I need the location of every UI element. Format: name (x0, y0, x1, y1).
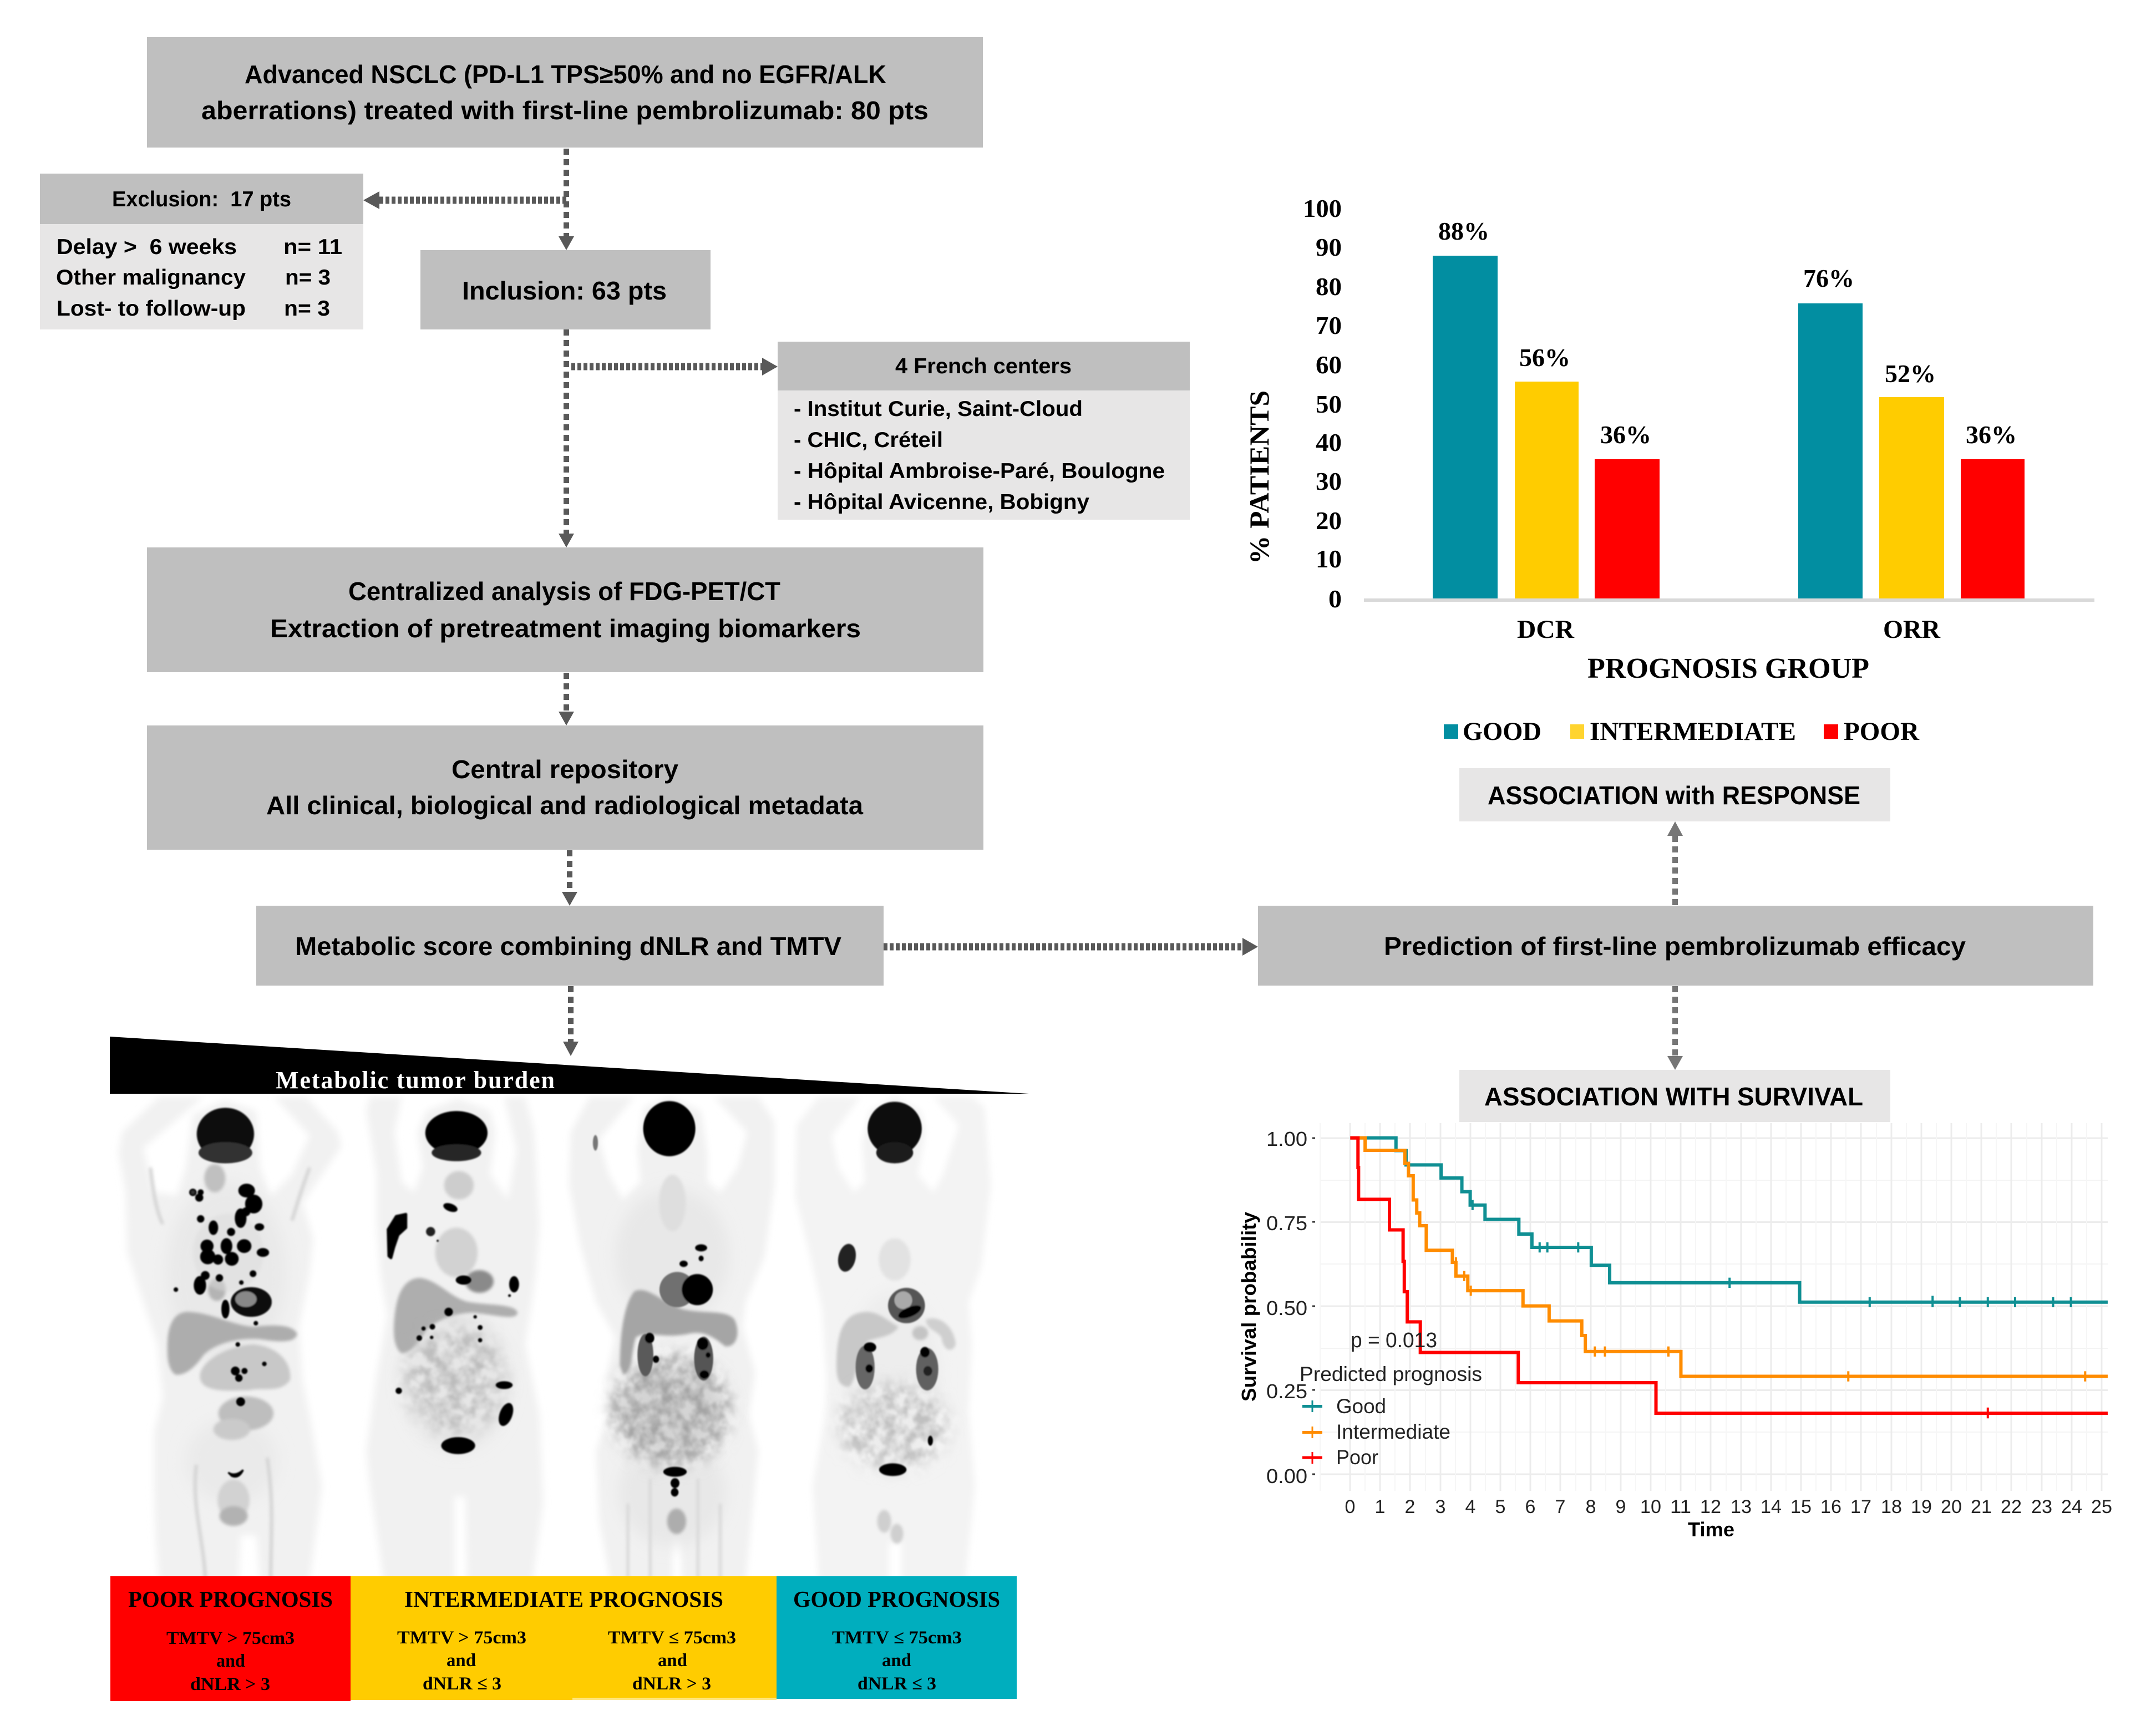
panel: exclusion: Lost- to follow-up (57, 297, 246, 321)
y axis labels: 40 (1316, 428, 1342, 456)
intermediate prognosis box: TMTV ≤ 75cm3 (608, 1628, 736, 1648)
panel: exclusion: Exclusion: 17 pts (112, 187, 291, 211)
curve: good prognosis (1350, 1138, 2108, 1307)
box: eligible population (147, 37, 983, 148)
lesions (175, 1185, 268, 1477)
lesions (593, 1135, 713, 1496)
panel: exclusion: n= 3 (284, 297, 330, 321)
panel: exclusion: Delay > 6 weeks (57, 235, 237, 259)
box: metabolic score: Metabolic score combining dNLR and TMTV (295, 932, 841, 961)
x axis title: Time (1688, 1518, 1734, 1541)
box: eligible population: aberrations) treated with first-line pembrolizumab: 80 pts (201, 96, 929, 125)
x tick labels: 6 (1525, 1496, 1535, 1517)
intermediate prognosis box: dNLR ≤ 3 (423, 1674, 501, 1694)
box: central repository (147, 725, 983, 850)
box: central repository: Central repository (451, 755, 678, 784)
bar value labels (1438, 217, 2017, 449)
box: centralized analysis (147, 547, 983, 672)
arrow: analysis to repository (559, 673, 574, 725)
good prognosis box: TMTV ≤ 75cm3 (832, 1628, 962, 1648)
y axis labels: 80 (1316, 272, 1342, 301)
x tick labels: 24 (2061, 1496, 2082, 1517)
curves (1350, 1138, 2108, 1418)
intermediate prognosis box: and (658, 1651, 687, 1671)
panel: PET scans (119, 1097, 991, 1581)
y tick labels: 0.75 (1266, 1212, 1307, 1235)
x tick labels: 12 (1700, 1496, 1721, 1517)
box: inclusion (420, 250, 711, 329)
y tick labels (1266, 1128, 1315, 1488)
curve: poor prognosis (1350, 1138, 2108, 1418)
x tick labels: 11 (1670, 1496, 1691, 1517)
arrow: score to prediction (884, 938, 1258, 956)
panel: exclusion (40, 174, 363, 329)
organs (836, 1238, 956, 1544)
organs (150, 1164, 310, 1578)
y axis labels (1303, 194, 1342, 613)
category labels: DCR (1517, 615, 1575, 644)
x tick labels: 22 (2001, 1496, 2022, 1517)
intermediate prognosis box: and (447, 1651, 476, 1671)
x tick labels: 5 (1495, 1496, 1505, 1517)
x axis title: PROGNOSIS GROUP (1587, 653, 1869, 684)
x tick labels: 8 (1586, 1496, 1596, 1517)
panel: french centers (778, 342, 1190, 520)
lesions (388, 1201, 519, 1454)
legend: Intermediate (1336, 1420, 1450, 1443)
arrow: prediction to survival (1667, 986, 1683, 1070)
silhouette (795, 1097, 991, 1581)
silhouette (119, 1097, 342, 1581)
PET scan 2: intermediate prognosis (366, 1097, 543, 1581)
mottled abdomen (610, 1353, 732, 1466)
y axis labels: 20 (1316, 506, 1342, 535)
panel: french centers: - Hôpital Avicenne, Bobigny (794, 490, 1089, 514)
bar value labels: 76% (1803, 265, 1854, 292)
box: association with survival (1459, 1070, 1890, 1122)
intermediate prognosis box: INTERMEDIATE PROGNOSIS (404, 1586, 723, 1612)
arrow: population to inclusion (559, 149, 574, 250)
arrow: repository to score (562, 850, 577, 906)
x tick labels: 17 (1850, 1496, 1871, 1517)
legend: POOR (1844, 717, 1920, 746)
category labels: ORR (1883, 615, 1941, 644)
panel: prognosis groups (110, 1576, 1017, 1701)
box: prediction of efficacy (1258, 906, 2093, 986)
wedge: metabolic tumor burden (110, 1037, 1029, 1094)
x tick labels: 7 (1555, 1496, 1565, 1517)
x tick labels: 19 (1911, 1496, 1932, 1517)
good prognosis box (777, 1576, 1017, 1699)
panel: exclusion: Other malignancy (56, 266, 246, 290)
curve: intermediate prognosis (1350, 1138, 2108, 1382)
legend (1300, 1363, 1482, 1469)
box: association with survival: ASSOCIATION WITH SURVIVAL (1484, 1082, 1863, 1111)
x tick labels: 4 (1465, 1496, 1475, 1517)
y axis title: Survival probability (1237, 1212, 1260, 1402)
x tick labels: 9 (1616, 1496, 1626, 1517)
box: inclusion: Inclusion: 63 pts (462, 276, 667, 305)
x tick labels: 3 (1435, 1496, 1445, 1517)
arrow: inclusion to centralized analysis (559, 329, 574, 547)
panel: french centers: - Hôpital Ambroise-Paré, Boulogne (794, 459, 1165, 483)
panel: exclusion: n= 11 (283, 235, 342, 259)
x tick labels: 23 (2031, 1496, 2052, 1517)
legend: Good (1336, 1395, 1386, 1418)
x tick labels: 0 (1345, 1496, 1355, 1517)
y axis labels: 90 (1316, 233, 1342, 261)
p value: p = 0.013 (1351, 1329, 1437, 1352)
bar value labels: 36% (1600, 421, 1651, 449)
good prognosis box: GOOD PROGNOSIS (793, 1586, 1000, 1612)
box: centralized analysis: Centralized analysis of FDG-PET/CT (348, 577, 780, 606)
x tick labels: 18 (1881, 1496, 1902, 1517)
legend: Poor (1336, 1446, 1378, 1469)
mottled abdomen (405, 1327, 504, 1433)
brain (425, 1111, 488, 1161)
y axis labels: 100 (1303, 194, 1342, 222)
box: centralized analysis: Extraction of pretreatment imaging biomarkers (270, 614, 861, 643)
bar chart: response by prognosis group (1244, 194, 2094, 746)
lesions (835, 1242, 938, 1476)
box: association with response: ASSOCIATION with RESPONSE (1488, 781, 1860, 810)
intermediate prognosis box: dNLR > 3 (632, 1674, 711, 1694)
liver (620, 1290, 737, 1374)
heart ring (231, 1287, 272, 1317)
legend (1444, 717, 1920, 746)
silhouette (366, 1097, 543, 1581)
x tick labels: 13 (1731, 1496, 1752, 1517)
organs (628, 1175, 720, 1578)
brain (867, 1102, 922, 1163)
y axis labels: 0 (1328, 585, 1342, 613)
arrow: score to PET images (563, 986, 579, 1056)
PET scan 4: good prognosis (795, 1097, 991, 1581)
y axis labels: 30 (1316, 467, 1342, 495)
panel: french centers: - Institut Curie, Saint-Cloud (794, 397, 1083, 421)
poor prognosis box: TMTV > 75cm3 (166, 1628, 295, 1648)
y axis labels: 10 (1316, 545, 1342, 573)
legend: GOOD (1463, 717, 1541, 746)
PET scan 1: poor prognosis (119, 1097, 342, 1581)
PET scan 3: intermediate prognosis (569, 1097, 774, 1581)
intermediate prognosis box: TMTV > 75cm3 (397, 1628, 526, 1648)
x tick labels: 16 (1820, 1496, 1841, 1517)
poor prognosis box: POOR PROGNOSIS (128, 1586, 333, 1612)
silhouette (569, 1097, 774, 1581)
bar value labels: 52% (1885, 360, 1936, 388)
x tick labels: 14 (1761, 1496, 1782, 1517)
x tick labels: 25 (2091, 1496, 2112, 1517)
y axis title: % PATIENTS (1244, 390, 1275, 564)
x tick labels: 15 (1790, 1496, 1812, 1517)
bars: ORR (1798, 303, 2025, 598)
y axis labels: 50 (1316, 390, 1342, 418)
brain (197, 1108, 254, 1163)
good prognosis box: dNLR ≤ 3 (858, 1674, 936, 1694)
wedge: metabolic tumor burden: Metabolic tumor burden (276, 1067, 555, 1094)
brain (643, 1101, 696, 1156)
x tick labels: 20 (1941, 1496, 1962, 1517)
organs (394, 1171, 518, 1353)
box: central repository: All clinical, biological and radiological metadata (266, 791, 863, 820)
y tick labels: 0.00 (1266, 1465, 1307, 1488)
category labels (1517, 615, 1941, 644)
x tick labels: 10 (1640, 1496, 1661, 1517)
panel: french centers: - CHIC, Créteil (794, 428, 943, 452)
chart: Kaplan-Meier survival curves (1237, 1123, 2112, 1541)
panel: french centers: 4 French centers (895, 354, 1072, 378)
x axis line (1364, 598, 2094, 602)
x tick labels: 21 (1971, 1496, 1992, 1517)
poor prognosis box (110, 1576, 351, 1701)
arrow: to exclusion (363, 191, 566, 209)
x tick labels: 1 (1375, 1496, 1385, 1517)
y tick labels: 0.25 (1266, 1380, 1307, 1403)
bar value labels: 36% (1966, 421, 2017, 449)
good prognosis box: and (882, 1651, 911, 1671)
bars: DCR (1433, 256, 1660, 598)
poor prognosis box: and (216, 1651, 245, 1671)
legend: INTERMEDIATE (1590, 717, 1796, 746)
box: eligible population: Advanced NSCLC (PD-L1 TPS≥50% and no EGFR/ALK (245, 60, 886, 89)
bar value labels: 56% (1519, 344, 1570, 372)
y tick labels: 0.50 (1266, 1297, 1307, 1319)
intermediate prognosis box (351, 1576, 777, 1700)
y axis labels: 70 (1316, 311, 1342, 339)
legend: Predicted prognosis (1300, 1363, 1482, 1385)
y axis labels: 60 (1316, 351, 1342, 379)
box: prediction of efficacy: Prediction of first-line pembrolizumab efficacy (1384, 932, 1966, 961)
bar value labels: 88% (1438, 217, 1489, 245)
plot grid (1320, 1123, 2108, 1491)
x tick labels (1345, 1496, 2112, 1517)
panel: exclusion: n= 3 (285, 266, 331, 290)
box: metabolic score (256, 906, 884, 986)
mottled abdomen (838, 1383, 950, 1468)
arrow: prediction to response (1667, 821, 1683, 905)
box: association with response (1459, 768, 1890, 821)
x tick labels: 2 (1405, 1496, 1415, 1517)
arrow: to french centers (571, 358, 778, 375)
y tick labels: 1.00 (1266, 1128, 1307, 1150)
poor prognosis box: dNLR > 3 (190, 1674, 270, 1694)
